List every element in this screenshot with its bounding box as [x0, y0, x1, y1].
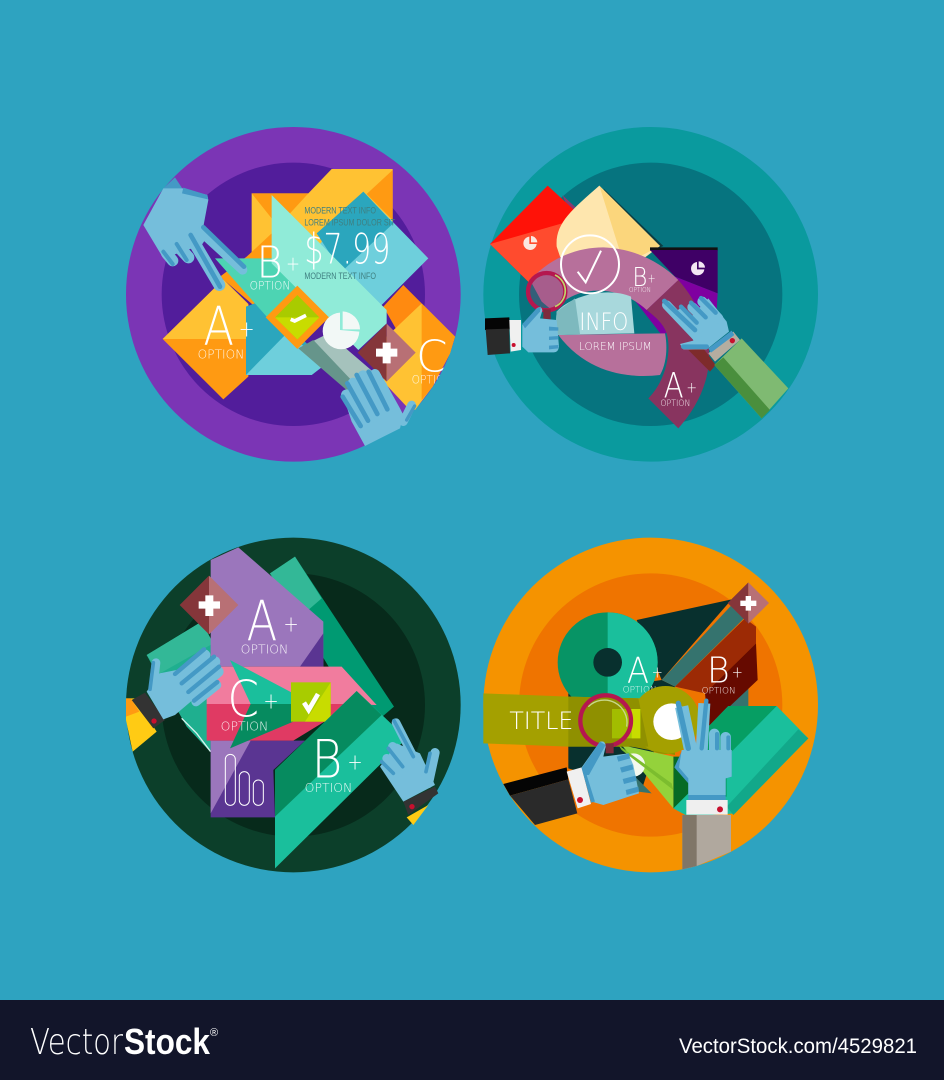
label A option: A: [203, 295, 234, 358]
panel: orange circle infographic: [483, 538, 818, 872]
icon: check square: [291, 682, 331, 722]
lime panel: [618, 745, 673, 808]
green disc with A option: [558, 612, 663, 712]
icon: pointing hand with green sleeve: [664, 298, 788, 418]
url text: VectorStock.com/4529821: [679, 1035, 917, 1058]
logo: VectorStock: ®: [210, 1027, 218, 1039]
label B option: +: [286, 252, 300, 276]
icon: hand bottom right: [343, 372, 415, 446]
olive title ribbon: [483, 686, 700, 755]
icon: open hand left with yellow sleeve: [126, 649, 219, 752]
icon: thumbs-up hand with black sleeve: [503, 741, 639, 825]
icon: circled check: [561, 235, 619, 293]
label B option: B: [632, 263, 647, 293]
price text block: $7.99: [304, 224, 390, 273]
wine curved band with A option: [647, 280, 709, 428]
panel: purple circle infographic: [126, 127, 461, 462]
purple A panel: [211, 547, 323, 667]
label A option: [198, 295, 255, 362]
purple circle base: [126, 127, 461, 462]
panel C option: OPTION: [412, 372, 452, 386]
dark green circle base: [126, 538, 461, 872]
green B panel: +: [347, 750, 363, 775]
red B panel: OPTION: [702, 686, 736, 696]
icon: magnifier: [528, 273, 565, 319]
icon: pie chart: [323, 311, 360, 349]
green arrow: [230, 660, 293, 748]
dark wedge panel: [568, 599, 748, 793]
pink lens panel: LOREM IPSUM: [579, 340, 652, 353]
left teal band: [147, 622, 220, 753]
green disc with A option: A: [627, 651, 649, 692]
panel C option: C: [416, 333, 448, 383]
red B panel: B: [707, 651, 730, 692]
icon: plus diamond: [180, 576, 238, 634]
label B option: [629, 263, 656, 294]
label A option: OPTION: [198, 347, 244, 362]
label B option: +: [648, 272, 656, 286]
panel A option diamond: [163, 279, 248, 399]
label B option: OPTION: [250, 279, 290, 293]
wine curved band with A option: +: [686, 378, 697, 396]
logo: VectorStock: Vector: [30, 1022, 123, 1063]
orange folded ribbon: [220, 169, 393, 317]
label B option: [250, 238, 300, 293]
info panel: INFO: [579, 308, 628, 336]
mint band: [272, 195, 387, 350]
purple panel with pie icon: [632, 247, 718, 335]
pink C panel: [207, 667, 377, 741]
green folded panel right: [673, 706, 808, 817]
teal circle base: [483, 127, 818, 462]
green disc with A option: OPTION: [623, 686, 657, 696]
wine curved band with A option: OPTION: [660, 399, 690, 409]
green B panel: [275, 691, 407, 868]
logo: VectorStock: Stock: [124, 1021, 211, 1062]
green B panel: B: [312, 729, 342, 790]
purple A panel: A: [247, 589, 277, 653]
red diamond with pie icon: [490, 186, 585, 283]
footer bar: [0, 1000, 944, 1080]
icon: plus diamond: [358, 324, 416, 382]
back green band: [270, 557, 394, 730]
orange block right: [383, 285, 422, 330]
icon: magnifier: [580, 695, 631, 753]
teal square panel: [246, 300, 327, 375]
label B option: OPTION: [629, 286, 651, 294]
pink lens panel: [558, 333, 666, 376]
icon: peace hand with gray sleeve: [674, 701, 732, 869]
orange circle base: [483, 538, 818, 872]
label C option: [221, 671, 279, 734]
label B option: B: [257, 238, 283, 288]
price text block: LOREM IPSUM DOLOR SIT: [304, 218, 395, 228]
label A option: +: [239, 318, 255, 343]
purple bar chart panel: [211, 741, 305, 817]
teal diamond panel: [307, 192, 428, 322]
cream leaf panel: [557, 186, 663, 263]
red B panel: [675, 618, 758, 727]
panel: dark green circle infographic: [126, 538, 461, 872]
icon: hand right with yellow sleeve: [380, 721, 438, 825]
logo: VectorStock: [30, 1021, 218, 1063]
panel: teal circle infographic: [483, 127, 818, 462]
icon: check diamond: [266, 286, 329, 349]
pink curved band: [530, 247, 678, 310]
price text block: MODERN TEXT INFO: [304, 205, 376, 215]
info panel: [555, 292, 634, 336]
icon: thumbs-up hand with black sleeve: [485, 307, 559, 355]
label C option: C: [227, 671, 259, 729]
price text block: MODERN TEXT INFO: [304, 271, 376, 281]
icon: pointing hand top left: [143, 177, 244, 287]
label C option: OPTION: [221, 719, 268, 734]
panel C option: [383, 303, 455, 410]
icon: plus diamond: [728, 582, 769, 624]
gray band: [298, 333, 387, 403]
red B panel: +: [732, 662, 743, 681]
green B panel: OPTION: [305, 780, 352, 795]
purple A panel: OPTION: [241, 642, 288, 657]
olive title ribbon: TITLE: [509, 707, 573, 735]
label C option: +: [263, 689, 279, 714]
panel B background: [215, 258, 307, 317]
green disc with A option: +: [652, 662, 663, 681]
wine curved band with A option: A: [664, 367, 684, 407]
purple A panel: +: [283, 613, 299, 638]
price text block: [304, 205, 395, 281]
